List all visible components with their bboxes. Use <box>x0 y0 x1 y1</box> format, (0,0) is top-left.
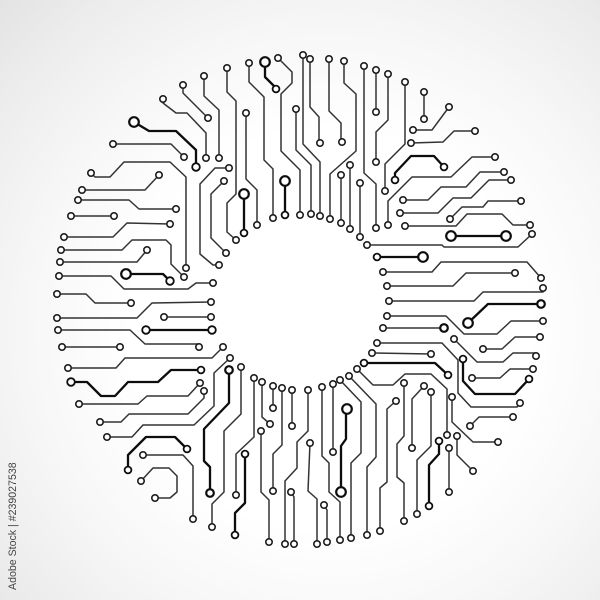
bottom-right quadrant traces <box>307 313 546 547</box>
bottom-left quadrant traces <box>54 291 311 547</box>
bold traces: top-left <box>121 57 290 285</box>
bold traces: top-right <box>374 156 511 262</box>
top-left quadrant traces <box>56 55 314 289</box>
top-right quadrant traces <box>300 52 546 304</box>
bold traces: bottom-right <box>336 300 545 509</box>
stock credit text: Adobe Stock | #239027538 <box>7 462 19 590</box>
bold traces: bottom-left <box>67 326 248 538</box>
